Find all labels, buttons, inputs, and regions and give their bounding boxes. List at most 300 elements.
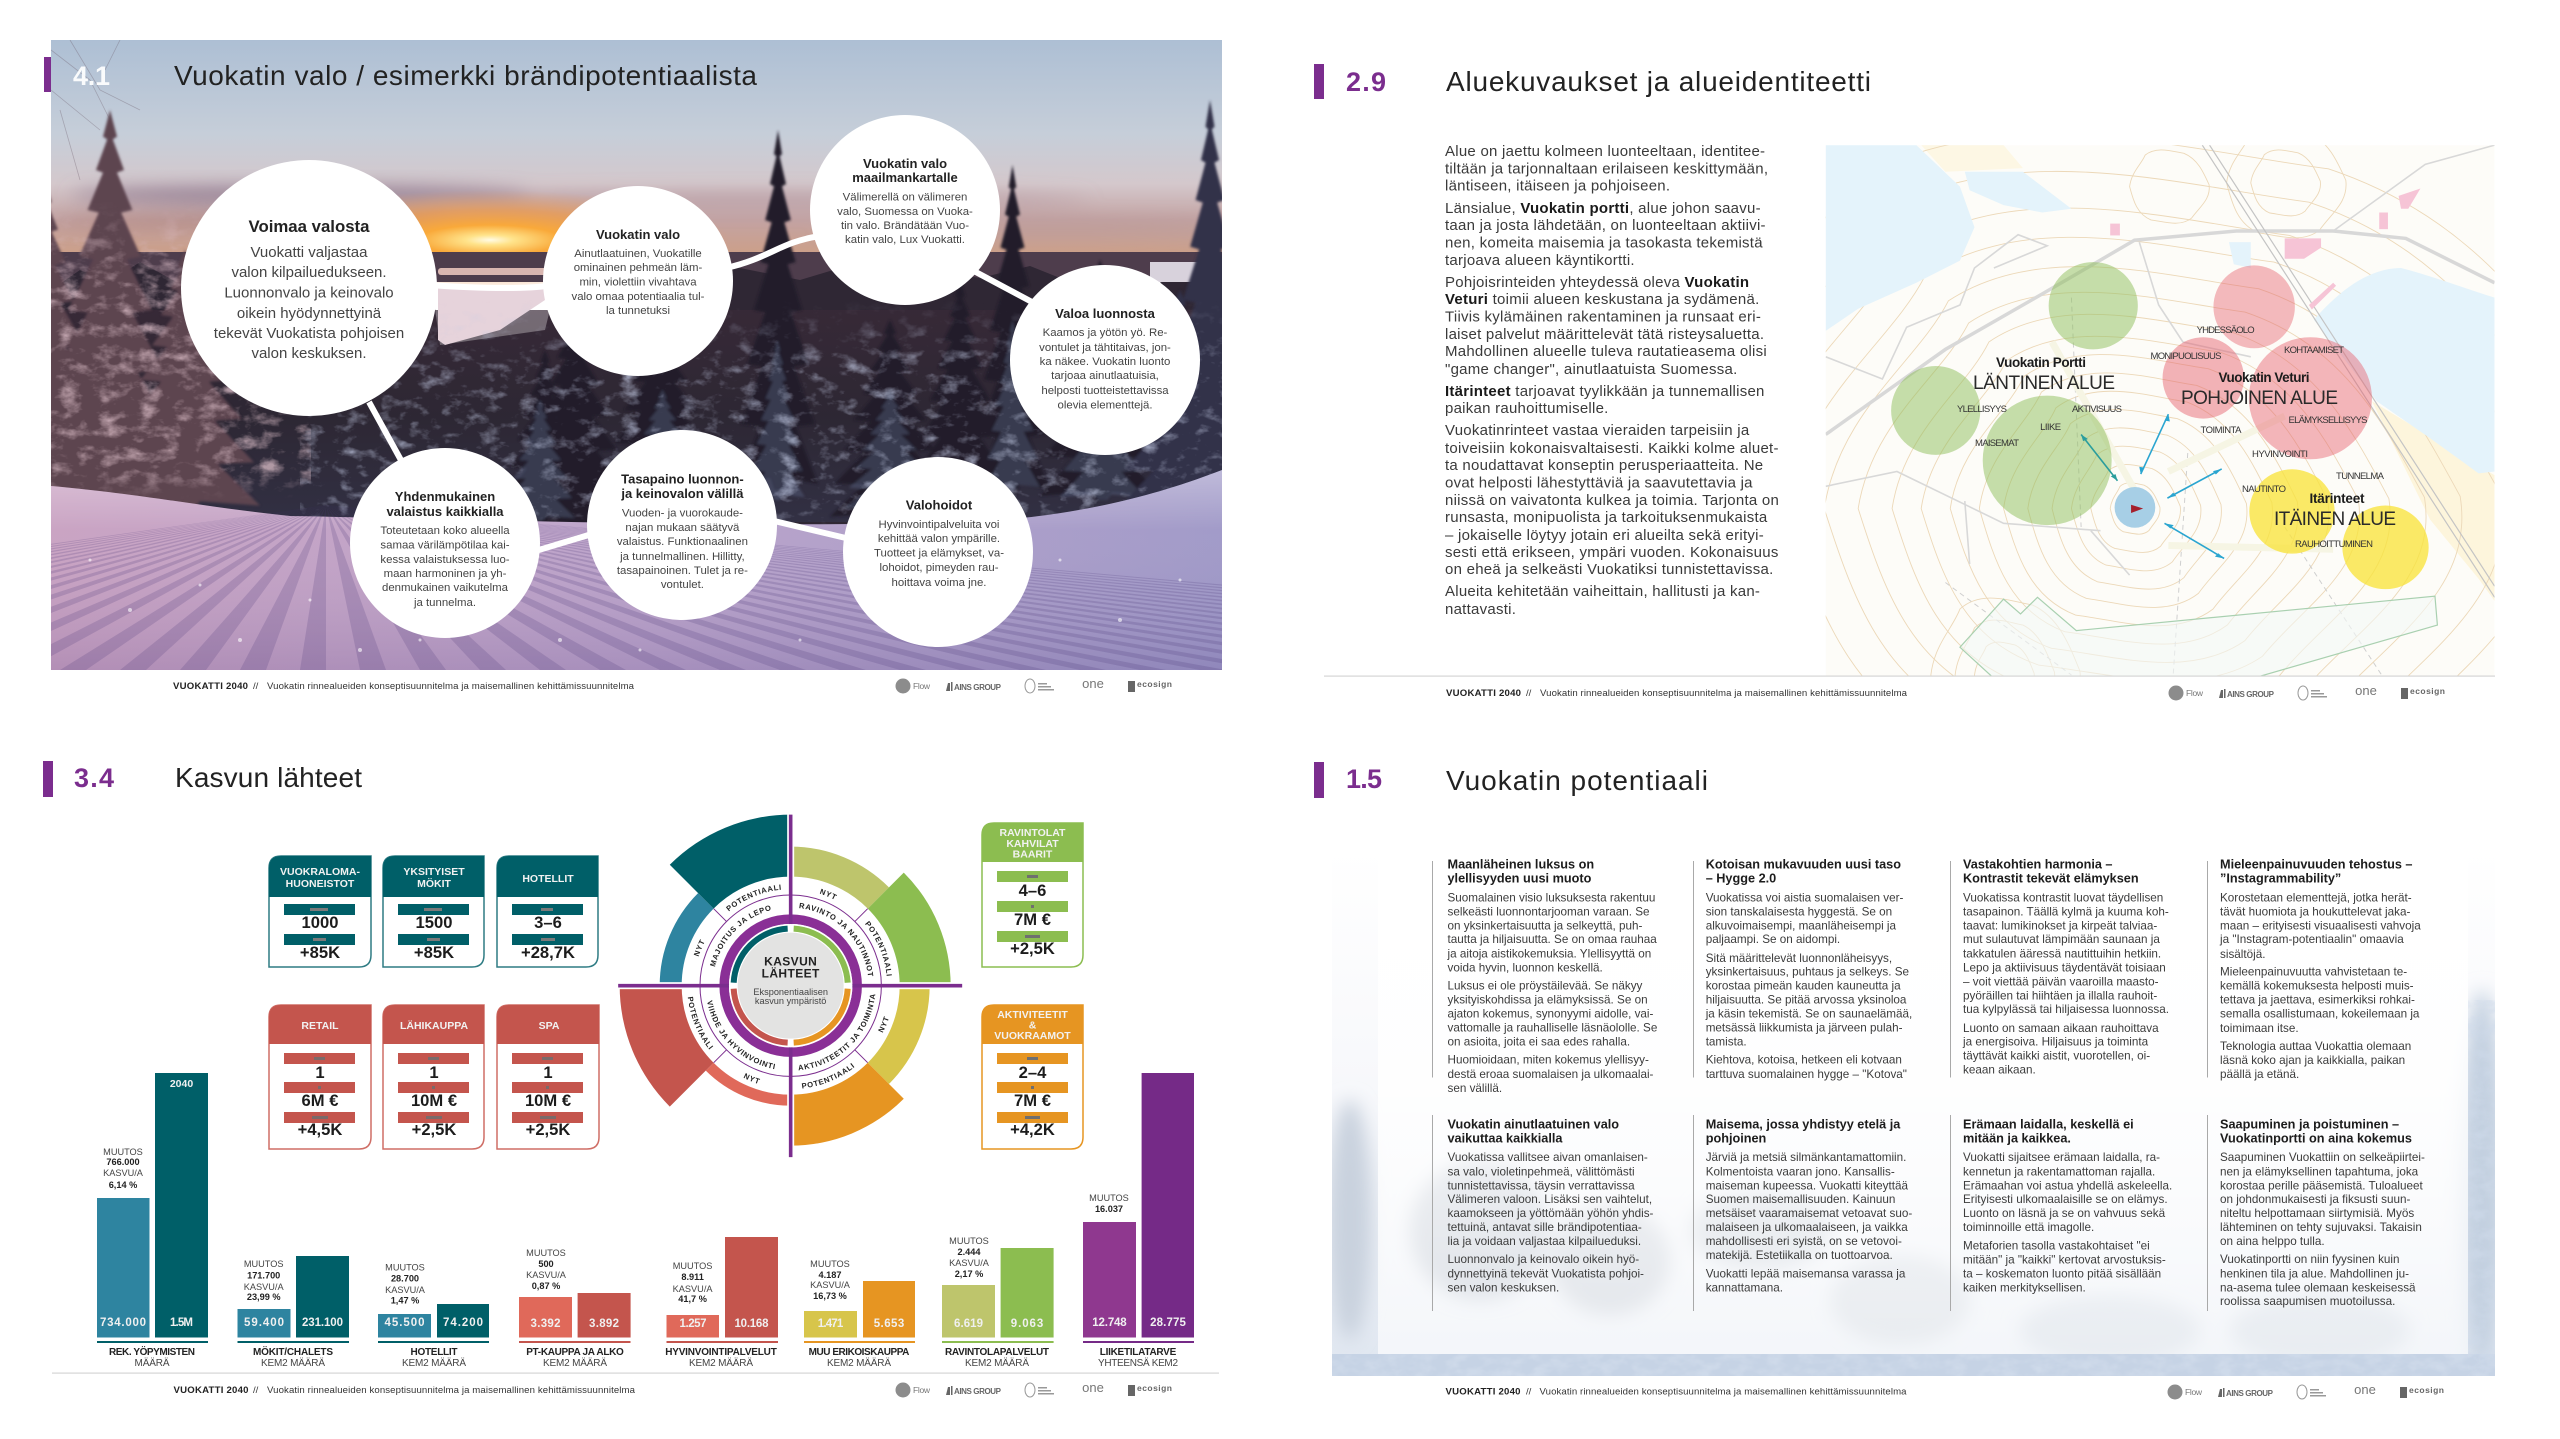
column: Vastakohtien harmonia	[1950, 858, 2169, 1078]
circle: Vuokatin valo maailmankartalle: tin valo. Brändätään Vuo-	[841, 220, 969, 232]
title: Vuokatin potentiaali	[1446, 765, 1708, 796]
card: Vuokraloma-huoneistot: HUONEISTOT	[286, 878, 355, 890]
text block: area description: Pohjoisrinteiden yhteydessä oleva Vuokatin	[1445, 274, 1749, 291]
column: Mieleenpainuvuuden tehostus: Korostetaan elementtejä, jotka herät-	[2220, 891, 2412, 904]
circle: Tasapaino: najan mukaan säätyvä	[625, 522, 740, 534]
column: Kotoisan mukavuuden uusi taso: Kotoisan mukavuuden uusi taso	[1706, 858, 1901, 872]
center label: Eksponentiaalisen	[753, 987, 828, 997]
radial diagram: Kasvun lähteet	[618, 814, 962, 1158]
column: Kotoisan mukavuuden uusi taso: yksinkertaisuus, puhtaus ja selkeys. Se	[1706, 966, 1909, 979]
bar chart: muu erikoiskauppa: 5.653	[874, 1318, 904, 1330]
column: Vuokatin ainutlaatuinen valo	[1432, 1115, 1654, 1311]
ring labels: NYT	[694, 939, 704, 956]
circle: Valohoidot: hoittava voima jne.	[892, 577, 986, 589]
bar chart: muu erikoiskauppa: KEM2 MÄÄRÄ	[827, 1357, 891, 1369]
bar chart: rek. yöpymisten määrä: 766.000	[106, 1157, 140, 1167]
column: Maanläheinen luksus: tautta ja hiljaisuutta. Se on omaa rauhaa	[1448, 933, 1657, 946]
column: Maisema: Vuokatti lepää maisemansa varassa ja	[1706, 1268, 1906, 1280]
section number 4.1	[44, 57, 110, 92]
bar chart: PT-kauppa ja Alko: 0,87 %	[532, 1281, 560, 1291]
column: Mieleenpainuvuuden tehostus: Mieleenpainuvuutta vahvistetaan te-	[2220, 966, 2407, 979]
card: Vuokraloma-huoneistot: +85K	[300, 943, 340, 962]
bar chart: ravintolapalvelut: KASVU/A	[949, 1258, 990, 1268]
ring labels: NYT	[820, 888, 837, 900]
card: Spa	[497, 1005, 599, 1149]
bar chart: hyvinvointipalvelut: KEM2 MÄÄRÄ	[689, 1357, 753, 1369]
column: Saapuminen ja poistuminen: Vuokatinportti on aina kokemus	[2220, 1132, 2412, 1146]
column: Erämaan laidalla: kennetun ja rakentamattoman rajalla.	[1963, 1165, 2155, 1178]
bar chart: mökit/chalets: KASVU/A	[244, 1282, 284, 1292]
column: Vastakohtien harmonia: Kontrastit tekevät elämyksen	[1963, 872, 2139, 886]
text block: area description: Itärinteet tarjoavat tyylikkään ja tunnemallisen	[1445, 383, 1765, 400]
bar chart: PT-kauppa ja Alko: PT-KAUPPA JA ALKO	[526, 1347, 624, 1358]
column: Vuokatin ainutlaatuinen valo: Vuokatin ainutlaatuinen valo	[1448, 1118, 1619, 1132]
bar chart: PT-kauppa ja Alko: 500	[538, 1259, 554, 1269]
column: Vuokatin ainutlaatuinen valo: Välimeren valoon. Lisäksi sen vaihtelut,	[1448, 1193, 1652, 1206]
column: Saapuminen ja poistuminen: roolissa saapumisen muotoilussa.	[2220, 1295, 2395, 1308]
ring labels: NYT	[744, 1073, 760, 1084]
column: Saapuminen ja poistuminen: on aina helppo tulla.	[2220, 1235, 2325, 1248]
column: Kotoisan mukavuuden uusi taso: sion tanskalaisesta hyggestä. Se on	[1706, 905, 1892, 918]
bar chart: hotellit: MUUTOS	[385, 1262, 425, 1272]
text block: area description: ovat helposti lähestyttäviä ja saavutettavia ja	[1445, 475, 1753, 492]
column: Erämaan laidalla	[1950, 1115, 2172, 1311]
column: Kotoisan mukavuuden uusi taso: – Hygge 2.0	[1706, 872, 1776, 886]
circle: Vuokatin valo maailmankartalle: Vuokatin valo	[863, 156, 947, 171]
column: Kotoisan mukavuuden uusi taso: Sitä määrittelevät luonnonläheisyys,	[1706, 952, 1892, 965]
bar chart: liiketilatarve: 12.748	[1092, 1317, 1127, 1329]
bar chart: ravintolapalvelut: 2,17 %	[955, 1269, 983, 1279]
ring labels: RAVINTO JA NAUTINNOT	[799, 902, 874, 976]
column: Mieleenpainuvuuden tehostus: toimimaan itse.	[2220, 1022, 2299, 1035]
column: Maanläheinen luksus: on asioita, joita ei saa edes rahalla.	[1448, 1036, 1630, 1049]
circle: Voimaa valosta: tekevät Vuokatista pohjoisen	[214, 325, 404, 342]
card: Lähikauppa: LÄHIKAUPPA	[400, 1019, 468, 1032]
column: Maisema: malaiseen ja ulkomaalaiseen, ja vaikka	[1706, 1221, 1908, 1234]
text block: area description: "game changer", ainutlaatuista Suomessa.	[1445, 361, 1737, 378]
column: Vastakohtien harmonia: täyttävät kaikki aistit, vuorotellen, oi-	[1963, 1050, 2150, 1063]
circle: Tasapaino: valaistus. Funktionaalinen	[617, 536, 748, 548]
column: Kotoisan mukavuuden uusi taso: hiljaisuutta. Se pitää arvossa yksinoloa	[1706, 994, 1907, 1007]
circle: Valohoidot: lohoidot, pimeyden rau-	[879, 562, 999, 574]
card: Vuokraloma-huoneistot: 1000	[302, 913, 338, 932]
footer: //	[253, 1385, 259, 1396]
bar chart: hotellit: HOTELLIT	[410, 1347, 458, 1358]
map labels: Vuokatin Portti	[1996, 355, 2086, 370]
circle: Valoa luonnosta: vontulet ja tähtitaivas, jon-	[1039, 342, 1171, 354]
card: Spa: SPA	[539, 1020, 560, 1032]
column: Maanläheinen luksus: sen välillä.	[1448, 1082, 1502, 1095]
map labels: KOHTAAMISET	[2284, 345, 2344, 356]
column: Mieleenpainuvuuden tehostus: sisältöjä.	[2220, 948, 2265, 961]
card: Hotellit: +28,7K	[521, 943, 575, 962]
column: Maanläheinen luksus: Suomalainen visio luksuksesta rakentuu	[1448, 891, 1655, 904]
column: Mieleenpainuvuuden tehostus: maan – erityisesti visuaalisesti vahvoja	[2220, 919, 2421, 932]
title: Aluekuvaukset ja alueidentiteetti	[1446, 66, 1871, 97]
ring labels: MAJOITUS JA LEPO	[710, 906, 770, 967]
column: Vastakohtien harmonia: Lepo ja aktiivisuus täydentävät toisiaan	[1963, 961, 2166, 974]
map labels: ELÄMYKSELLISYYS	[2288, 415, 2368, 426]
circle: Vuokatin valo	[543, 186, 733, 376]
card: Yksityiset mökit: YKSITYISET	[403, 866, 465, 878]
column: Erämaan laidalla: ta – koskematon luonto pitää sisällään	[1963, 1268, 2161, 1280]
circle: Voimaa valosta: oikein hyödynnettyinä	[237, 305, 382, 322]
column: Vuokatin ainutlaatuinen valo: lia ja voidaan valjastaa kilpailueduksi.	[1448, 1235, 1641, 1248]
column: Erämaan laidalla: Erämaan laidalla, keskellä ei	[1963, 1118, 2134, 1132]
card: Aktiviteetit: &	[1029, 1020, 1037, 1032]
bar chart: liiketilatarve	[1083, 1073, 1194, 1369]
column: Vastakohtien harmonia: takkatulen ääressä nautittuihin hetkiin.	[1963, 948, 2161, 960]
section number 4.1: 4.1	[73, 61, 110, 91]
circle: Voimaa valosta: Voimaa valosta	[249, 217, 370, 236]
footer: Vuokatin rinnealueiden konseptisuunnitelma ja maisemallinen kehittämissuunnitelma	[1540, 688, 1908, 699]
circle: Yhdenmukainen valaistus: kessa valaistuksessa luo-	[380, 554, 510, 566]
bar chart: muu erikoiskauppa: MUUTOS	[810, 1259, 850, 1269]
column: Vastakohtien harmonia: mut sulautuvat lämpimään saunaan ja	[1963, 933, 2160, 946]
column: Erämaan laidalla: Vuokatti sijaitsee erämaan laidalla, ra-	[1963, 1151, 2160, 1164]
bar chart: liiketilatarve: LIIKETILATARVE	[1100, 1347, 1177, 1358]
column: Vuokatin ainutlaatuinen valo: Luonnonvalo ja keinovalo oikein hyö-	[1448, 1253, 1639, 1266]
card: Lähikauppa: +2,5K	[412, 1120, 456, 1139]
column: Vastakohtien harmonia: Vuokatissa kontrastit luovat täydellisen	[1963, 891, 2163, 904]
center label: KASVUN	[764, 955, 817, 969]
bar chart: mökit/chalets: 171.700	[247, 1271, 280, 1281]
column: Maisema	[1693, 1115, 1912, 1311]
bar chart: mökit/chalets: KEM2 MÄÄRÄ	[261, 1357, 325, 1369]
snowy spruces	[0, 100, 1255, 530]
column: Maisema: Kolmentoista vaaran jono. Kansallis-	[1706, 1165, 1895, 1178]
column: Erämaan laidalla: mitään ja kaikkea.	[1963, 1132, 2071, 1146]
section number 1.5	[1314, 762, 1382, 798]
logos: one	[2354, 1382, 2376, 1397]
column: Vuokatin ainutlaatuinen valo: vaikuttaa kaikkialla	[1448, 1132, 1563, 1146]
card: Hotellit: HOTELLIT	[522, 873, 574, 885]
circle: Yhdenmukainen valaistus: Toteutetaan koko alueella	[380, 525, 510, 537]
bar chart: hyvinvointipalvelut: 10.168	[734, 1318, 769, 1330]
bar chart: muu erikoiskauppa	[804, 1259, 915, 1369]
footer: //	[253, 681, 259, 692]
column: Saapuminen ja poistuminen: na-asema tulee olemaan keskeisessä	[2220, 1281, 2416, 1294]
map labels: TUNNELMA	[2336, 471, 2385, 482]
card: Yksityiset mökit	[383, 856, 484, 967]
column: Mieleenpainuvuuden tehostus: ja "Instagram-potentiaalin" omaavia	[2219, 933, 2404, 946]
column: Saapuminen ja poistuminen: korostaa perille pääsemistä. Tuloalueet	[2220, 1179, 2423, 1192]
bar chart: hotellit	[378, 1262, 489, 1369]
circle: Voimaa valosta: Vuokatti valjastaa	[250, 244, 368, 261]
card: Retail: RETAIL	[301, 1020, 339, 1032]
map labels: ITÄINEN ALUE	[2274, 509, 2396, 530]
bar chart: ravintolapalvelut: KEM2 MÄÄRÄ	[965, 1357, 1029, 1369]
column: Kotoisan mukavuuden uusi taso: Kiehtova, kotoisa, hetkeen eli kotvaan	[1706, 1054, 1902, 1067]
column: Saapuminen ja poistuminen: lähteminen on tehty sujuvaksi. Takaisin	[2220, 1221, 2422, 1234]
map labels: LÄNTINEN ALUE	[1973, 373, 2115, 394]
column: Maisema: mahdollisesti eri syistä, on se vetovoi-	[1706, 1235, 1902, 1248]
card: Ravintolat	[982, 823, 1083, 967]
column: Vuokatin ainutlaatuinen valo: sa valo, violetinpehmeä, välittömästi	[1448, 1165, 1635, 1178]
column: Erämaan laidalla: Metaforien tasolla vastakohtaiset "ei	[1963, 1240, 2150, 1253]
ring labels: AKTIVITEETIT JA TOIMINTA	[798, 994, 876, 1070]
column: Mieleenpainuvuuden tehostus: semalla osallistumaan, kokeilemaan ja	[2220, 1008, 2420, 1020]
bar chart: liiketilatarve: MUUTOS	[1089, 1193, 1129, 1203]
column: Kotoisan mukavuuden uusi taso: Vuokatissa voi aistia suomalaisen ver-	[1706, 891, 1904, 904]
column: Vuokatin ainutlaatuinen valo: tunnistettavissa, täysin verrattavissa	[1448, 1179, 1635, 1192]
column: Maanläheinen luksus: on yksinkertaisuutta ja selkeyttä, puh-	[1448, 919, 1643, 932]
footer: VUOKATTI 2040	[173, 681, 248, 692]
column: Maanläheinen luksus: ja aitoja aistikokemuksia. Ylellisyyttä on	[1446, 948, 1651, 960]
column: Maisema: maiseman kupeessa. Vuokatti kiteyttää	[1706, 1179, 1908, 1192]
column: Vastakohtien harmonia: ja energisoiva. Hiljaisuus ja toiminta	[1962, 1036, 2149, 1049]
column: Mieleenpainuvuuden tehostus: Mieleenpainuvuuden tehostus –	[2220, 858, 2412, 872]
bar chart: PT-kauppa ja Alko: KASVU/A	[526, 1270, 567, 1280]
column: Erämaan laidalla: Erämaahan voi astua yhdellä askeleella.	[1963, 1179, 2172, 1192]
bar chart: muu erikoiskauppa: 16,73 %	[813, 1291, 847, 1301]
circle: Tasapaino: ja keinovalon välillä	[620, 486, 744, 501]
column: Erämaan laidalla: kaiken merkityksellisen.	[1963, 1281, 2086, 1294]
card: Aktiviteetit: VUOKRAAMOT	[994, 1030, 1071, 1042]
column: Saapuminen ja poistuminen: henkinen tila ja alue. Mahdollinen ju-	[2220, 1268, 2409, 1280]
footer: //	[1526, 1387, 1532, 1398]
map labels: RAUHOITTUMINEN	[2295, 539, 2373, 550]
column: Maisema: pohjoinen	[1706, 1132, 1766, 1146]
text block: area description: Alue on jaettu kolmeen luonteeltaan, identitee-	[1445, 143, 1765, 160]
column: Mieleenpainuvuuden tehostus: Teknologia auttaa Vuokattia olemaan	[2220, 1040, 2411, 1053]
bar chart: PT-kauppa ja Alko: KEM2 MÄÄRÄ	[543, 1357, 607, 1369]
bar chart: mökit/chalets: 23,99 %	[247, 1292, 281, 1302]
bar chart: hyvinvointipalvelut: HYVINVOINTIPALVELUT	[665, 1347, 777, 1358]
map labels: HYVINVOINTI	[2252, 449, 2308, 460]
circle: Vuokatin valo maailmankartalle: maailmankartalle	[852, 170, 958, 185]
bar chart: hotellit: 74.200	[443, 1317, 483, 1329]
card: Yksityiset mökit: MÖKIT	[417, 877, 451, 890]
card: Aktiviteetit: 7M €	[1014, 1091, 1051, 1110]
circle: Yhdenmukainen valaistus: denmukainen vaikutelma	[382, 582, 509, 594]
map of Vuokatti areas	[1826, 145, 2495, 676]
bar chart: rek. yöpymisten määrä	[97, 1073, 208, 1369]
card: Aktiviteetit: +4,2K	[1010, 1120, 1055, 1139]
card: Vuokraloma-huoneistot: VUOKRALOMA-	[280, 866, 360, 878]
text block: area description: on eheä ja selkeästi Vuokatiksi tunnistettavissa.	[1445, 561, 1774, 578]
bar chart: hotellit: KEM2 MÄÄRÄ	[402, 1357, 466, 1369]
column: Maisema: kannattamana.	[1706, 1281, 1783, 1294]
text block: area description: Mahdollinen alueelle tuleva rautatieasema olisi	[1445, 343, 1767, 360]
column: Mieleenpainuvuuden tehostus	[2207, 858, 2421, 1081]
connectors between circles	[369, 236, 1032, 552]
circle: Valoa luonnosta: helposti tuotteistettavissa	[1041, 385, 1169, 397]
text block: area description: tarjoava alueen käyntikortti.	[1445, 252, 1635, 269]
text block: area description: Alueita kehitetään vaiheittain, hallitusti ja kan-	[1445, 583, 1760, 600]
column: Saapuminen ja poistuminen: nen ja elämyksellinen tapahtuma, joka	[2220, 1165, 2419, 1178]
circle: Vuokatin valo: ominainen pehmeän läm-	[574, 262, 702, 274]
footer: Vuokatin rinnealueiden konseptisuunnitelma ja maisemallinen kehittämissuunnitelma	[267, 1385, 636, 1396]
circle: Valoa luonnosta: ka näkee. Vuokatin luonto	[1040, 356, 1170, 368]
column: Mieleenpainuvuuden tehostus: ”Instagrammability”	[2220, 872, 2341, 886]
bar chart: muu erikoiskauppa: 1.471	[818, 1318, 844, 1330]
base map	[1826, 145, 2495, 676]
text block: area description: ta noudattavat konseptin perusperiaatteita. Ne	[1445, 457, 1763, 474]
text block: area description: Veturi toimii alueen keskustana ja sydämenä.	[1445, 291, 1760, 308]
column: Vastakohtien harmonia: taavat: lumikinokset ja kirpeät talviaa-	[1963, 919, 2157, 932]
footer: VUOKATTI 2040	[1446, 1387, 1520, 1398]
circle: Tasapaino	[587, 430, 777, 620]
circle: Tasapaino: tasapainoinen. Tulet ja re-	[617, 565, 748, 577]
column: Maanläheinen luksus: Luksus ei ole pröystäilevää. Se näkyy	[1448, 980, 1643, 993]
column: Erämaan laidalla: toiminnoille että imagolle.	[1963, 1221, 2094, 1234]
footer: //	[1526, 688, 1532, 699]
map labels: TOIMINTA	[2200, 425, 2242, 436]
card: Spa: 1	[543, 1063, 553, 1082]
bar chart: liiketilatarve: YHTEENSÄ KEM2	[1098, 1357, 1178, 1369]
bar chart: hotellit: KASVU/A	[385, 1285, 426, 1295]
logos: one	[2355, 683, 2377, 698]
circle: Vuokatin valo maailmankartalle: valo, Suomessa on Vuoka-	[837, 206, 973, 218]
bar chart: liiketilatarve: 16.037	[1095, 1204, 1123, 1214]
column: Kotoisan mukavuuden uusi taso: metsässä liikkumista ja järveen pulah-	[1706, 1021, 1903, 1034]
footer: Vuokatin rinnealueiden konseptisuunnitelma ja maisemallinen kehittämissuunnitelma	[267, 681, 635, 692]
circle: Yhdenmukainen valaistus: samaa värilämpötilaa kai-	[380, 540, 510, 552]
bar chart: hyvinvointipalvelut: 41,7 %	[678, 1294, 707, 1304]
circle: Voimaa valosta: valon kilpailuedukseen.	[231, 264, 387, 281]
card: Ravintolat: BAARIT	[1013, 848, 1053, 860]
text block: area description: toiveisiin kokonaisvaltaisesti. Kaikki kolme aluet-	[1445, 440, 1779, 457]
logos: AINS GROUP	[954, 683, 1002, 692]
column: Maanläheinen luksus: selkeästi luonnontarjooman varaan. Se	[1448, 905, 1650, 918]
text block: area description: Tiivis kylämäinen rakentaminen ja runsaat eri-	[1445, 308, 1761, 325]
circle: Valohoidot: Valohoidot	[906, 498, 973, 513]
column: Vastakohtien harmonia: keaan aikaan.	[1963, 1064, 2036, 1077]
circle: Vuokatin valo: Ainutlaatuinen, Vuokatille	[574, 248, 702, 260]
column: Maisema: Maisema, jossa yhdistyy etelä ja	[1706, 1118, 1901, 1132]
bar chart: mökit/chalets	[238, 1256, 349, 1369]
column: Vastakohtien harmonia: tasapainon. Täällä kylmä ja kuuma koh-	[1963, 905, 2169, 918]
circle: Valohoidot	[843, 457, 1033, 647]
text block: area description: Vuokatinrinteet vastaa vieraiden tarpeisiin ja	[1445, 422, 1750, 439]
bar chart: hyvinvointipalvelut: 1.257	[680, 1318, 706, 1330]
column: Vuokatin ainutlaatuinen valo: Vuokatissa vallitsee aivan omanlaisen-	[1448, 1151, 1648, 1164]
logos: Flow	[913, 1385, 931, 1395]
bar chart: hotellit: 45.500	[384, 1317, 424, 1329]
circle: Yhdenmukainen valaistus	[350, 448, 540, 638]
map labels: POHJOINEN ALUE	[2181, 388, 2338, 409]
logos: ecosign	[1137, 679, 1172, 689]
card: Spa: 10M €	[525, 1091, 571, 1110]
column: Mieleenpainuvuuden tehostus: kemällä kokemuksesta helposti muis-	[2220, 980, 2414, 993]
column: Vuokatin ainutlaatuinen valo: kaamokseen ja yöttömään yöhön yhdis-	[1448, 1207, 1654, 1220]
bar chart: rek. yöpymisten määrä: 1.5M	[170, 1317, 193, 1329]
column: Maisema: Järviä ja metsiä silmänkantamattomiin.	[1706, 1151, 1906, 1164]
bar chart: rek. yöpymisten määrä: KASVU/A	[103, 1168, 144, 1178]
card: Lähikauppa	[383, 1005, 484, 1149]
card: Vuokraloma-huoneistot	[269, 856, 371, 967]
panel: 3.4 growth sources	[43, 761, 1219, 1398]
bar chart: muu erikoiskauppa: 4.187	[818, 1270, 842, 1280]
bar chart: rek. yöpymisten määrä: REK. YÖPYMISTEN	[109, 1345, 195, 1358]
circle: Tasapaino: vontulet.	[661, 579, 704, 591]
logos: one	[1082, 1380, 1104, 1395]
logos: one	[1082, 676, 1104, 691]
circle: Vuokatin valo: la tunnetuksi	[606, 305, 670, 317]
bar chart: hotellit: 1,47 %	[391, 1296, 419, 1306]
circle: Yhdenmukainen valaistus: ja tunnelma.	[413, 597, 476, 609]
column: Maanläheinen luksus: destä eroaa suomalaisen ja ulkomaalai-	[1448, 1068, 1654, 1081]
column: Kotoisan mukavuuden uusi taso: paljaampi. Se on aidompi.	[1706, 933, 1840, 946]
column: Maanläheinen luksus: yksityiskohdissa ja elämyksissä. Se on	[1448, 994, 1648, 1007]
bar chart: hyvinvointipalvelut	[665, 1237, 778, 1369]
column: Kotoisan mukavuuden uusi taso	[1693, 858, 1912, 1081]
column: Kotoisan mukavuuden uusi taso: korostaa pimeän kauden kauneutta ja	[1706, 980, 1901, 993]
card: Retail: 1	[315, 1063, 325, 1082]
text block: area description: läntiseen, itäiseen ja pohjoiseen.	[1445, 178, 1670, 194]
bar chart: ravintolapalvelut: 6.619	[954, 1318, 983, 1330]
panel: 1.5 Vuokatti potential	[1314, 762, 2504, 1400]
circle: Valoa luonnosta: Valoa luonnosta	[1055, 306, 1156, 321]
section number 3.4	[43, 761, 114, 797]
column: Maanläheinen luksus: voida hyvin, luonnon keskellä.	[1448, 961, 1603, 974]
section number 2.9: 2.9	[1346, 67, 1386, 97]
bar chart: ravintolapalvelut: MUUTOS	[949, 1236, 989, 1246]
column: Vastakohtien harmonia: tua kylpylässä tai hiljaisessa luonnossa.	[1963, 1003, 2169, 1016]
map labels: YHDESSÄOLO	[2197, 325, 2255, 336]
bar chart: hotellit: 28.700	[391, 1274, 419, 1284]
column: Kotoisan mukavuuden uusi taso: alkuvoimaisempi, maanläheisempi ja	[1706, 919, 1897, 932]
bar chart: muu erikoiskauppa: KASVU/A	[810, 1280, 851, 1290]
column: Saapuminen ja poistuminen: Saapuminen ja poistuminen –	[2220, 1118, 2399, 1132]
footer: Vuokatin rinnealueiden konseptisuunnitelma ja maisemallinen kehittämissuunnitelma	[1540, 1387, 1907, 1398]
circle: Valohoidot: kehittää valon ympärille.	[878, 533, 1000, 545]
text block: area description: paikan rauhoittumiselle.	[1445, 400, 1609, 417]
ring labels	[688, 884, 892, 1088]
column: Mieleenpainuvuuden tehostus: tävät huomiota ja houkuttelevat jaka-	[2220, 905, 2410, 918]
title: Vuokatin valo / esimerkki brändipotentiaalista	[174, 60, 757, 91]
center label	[753, 955, 828, 1006]
bar chart: mökit/chalets: 231.100	[302, 1317, 343, 1329]
card: Retail: +4,5K	[298, 1120, 342, 1139]
map labels	[1957, 325, 2396, 550]
ring labels: VIIHDE JA HYVINVOINTI	[707, 1000, 776, 1070]
text block: area description: niissä on vaivatonta kulkea ja toimia. Tarjonta on	[1445, 492, 1779, 509]
logos: Flow	[2186, 688, 2204, 698]
logos: Flow	[913, 681, 931, 691]
logos	[896, 1380, 1172, 1398]
circle: Vuokatin valo: min, violettiin vivahtava	[579, 277, 697, 289]
circle: Vuokatin valo: Vuokatin valo	[596, 227, 680, 242]
bar chart: PT-kauppa ja Alko: 3.892	[589, 1318, 619, 1330]
circle: Yhdenmukainen valaistus: valaistus kaikkialla	[386, 504, 504, 519]
bar chart: rek. yöpymisten määrä: 6,14 %	[109, 1180, 137, 1190]
circle: Vuokatin valo: valo omaa potentiaalia tul-	[572, 291, 705, 303]
column: Saapuminen ja poistuminen	[2207, 1115, 2425, 1311]
column: Maanläheinen luksus: ylellisyyden uusi muoto	[1448, 872, 1592, 886]
card: Ravintolat: 4–6	[1019, 881, 1046, 900]
bar chart: PT-kauppa ja Alko: 3.392	[530, 1318, 560, 1330]
column: Kotoisan mukavuuden uusi taso: ja käsin tekemistä. Se on saunaelämää,	[1705, 1008, 1912, 1020]
map labels: Vuokatin Veturi	[2218, 370, 2310, 385]
circle: Yhdenmukainen valaistus: Yhdenmukainen	[395, 489, 495, 504]
card: Aktiviteetit: 2–4	[1019, 1063, 1047, 1082]
outer sectors	[620, 815, 951, 1146]
card: Ravintolat: 7M €	[1014, 910, 1051, 929]
column: Erämaan laidalla: mitään" ja "kaikki" kertovat arvostuksis-	[1963, 1254, 2166, 1267]
map labels: YLELLISYYS	[1957, 404, 2007, 415]
logos: ecosign	[2409, 1385, 2444, 1395]
column: Maisema: Suomen maisemallisuuden. Kainuun	[1706, 1193, 1895, 1206]
card: Aktiviteetit: AKTIVITEETIT	[997, 1009, 1068, 1021]
bar chart: rek. yöpymisten määrä: MÄÄRÄ	[134, 1357, 170, 1369]
purple axes	[618, 815, 962, 1157]
card: Hotellit: 3–6	[534, 913, 562, 932]
bar chart: muu erikoiskauppa: MUU ERIKOISKAUPPA	[809, 1347, 909, 1358]
map labels: LIIKE	[2040, 422, 2061, 433]
column: Maisema: metsäiset vaaramaisemat vetoavat suo-	[1706, 1207, 1912, 1220]
